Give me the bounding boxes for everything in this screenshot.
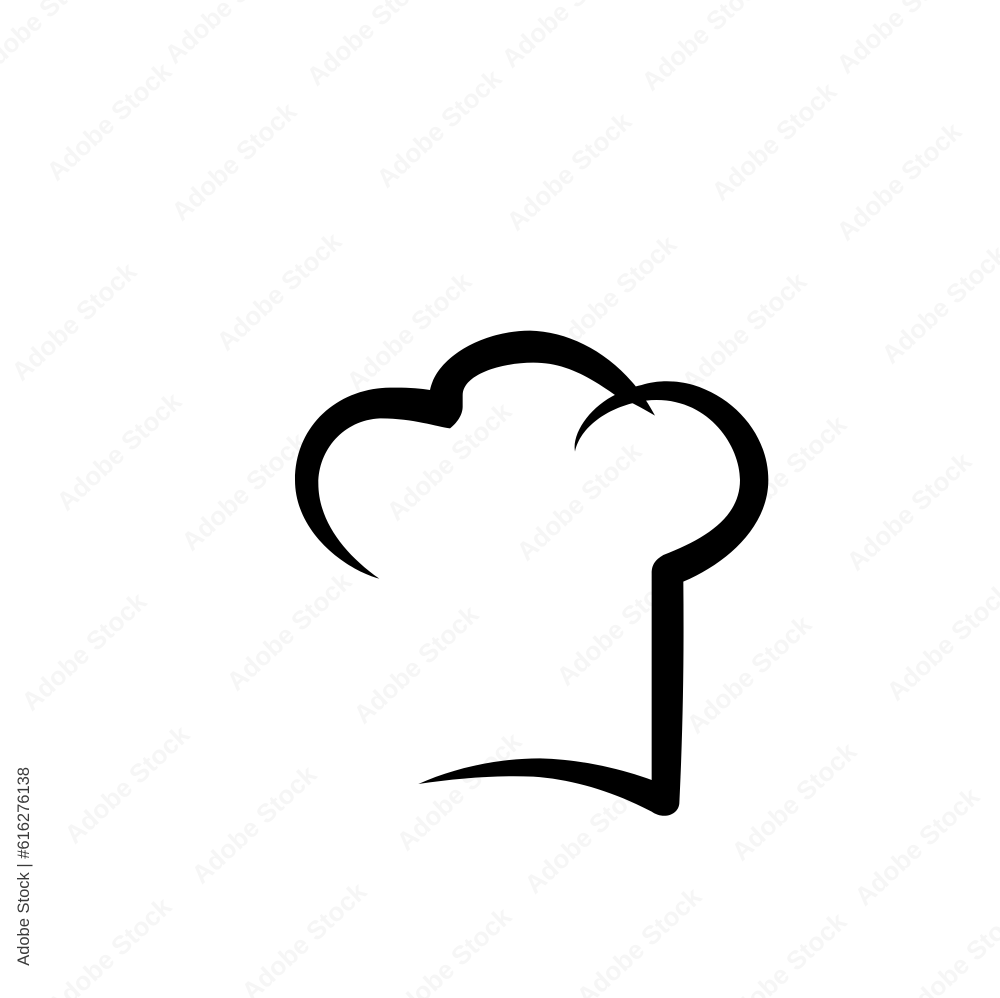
watermark pattern: Adobe Stock: [849, 781, 986, 912]
watermark pattern: Adobe Stock: [519, 769, 656, 900]
watermark pattern: Adobe Stock: [831, 116, 968, 247]
hat right puff and band: [418, 381, 768, 816]
watermark pattern: Adobe Stock: [16, 586, 153, 717]
watermark pattern: Adobe Stock: [676, 266, 813, 397]
watermark pattern: Adobe Stock: [6, 256, 143, 387]
watermark pattern: Adobe Stock: [371, 63, 508, 194]
watermark pattern: Adobe Stock: [381, 396, 518, 527]
watermark pattern: Adobe Stock: [681, 609, 818, 740]
watermark pattern: Adobe Stock: [546, 229, 683, 360]
watermark pattern: Adobe Stock: [41, 56, 178, 187]
watermark pattern: Adobe Stock: [551, 561, 688, 692]
watermark pattern: Adobe Stock: [176, 426, 313, 557]
watermark pattern: Adobe Stock: [501, 106, 638, 237]
watermark pattern: Adobe Stock: [841, 446, 978, 577]
watermark pattern: Adobe Stock: [726, 736, 863, 867]
watermark pattern: Adobe Stock: [186, 759, 323, 890]
icon: chef hat: [295, 331, 768, 816]
watermark pattern: Adobe Stock: [221, 566, 358, 697]
watermark pattern: Adobe Stock: [51, 386, 188, 517]
hat left and top puff: [295, 331, 655, 579]
watermark pattern: Adobe Stock: [716, 409, 853, 540]
watermark pattern: Adobe Stock: [348, 599, 485, 730]
watermark pattern: Adobe Stock: [341, 266, 478, 397]
watermark pattern: Adobe Stock: [166, 96, 303, 227]
watermark pattern: Adobe Stock: [59, 719, 196, 850]
vertical stock id caption: Adobe Stock | #616276138: [15, 767, 33, 966]
watermark pattern: Adobe Stock: [211, 226, 348, 357]
watermark pattern: Adobe Stock: [391, 726, 528, 857]
watermark pattern: Adobe Stock: [511, 436, 648, 567]
watermark pattern: Adobe Stock: [706, 76, 843, 207]
